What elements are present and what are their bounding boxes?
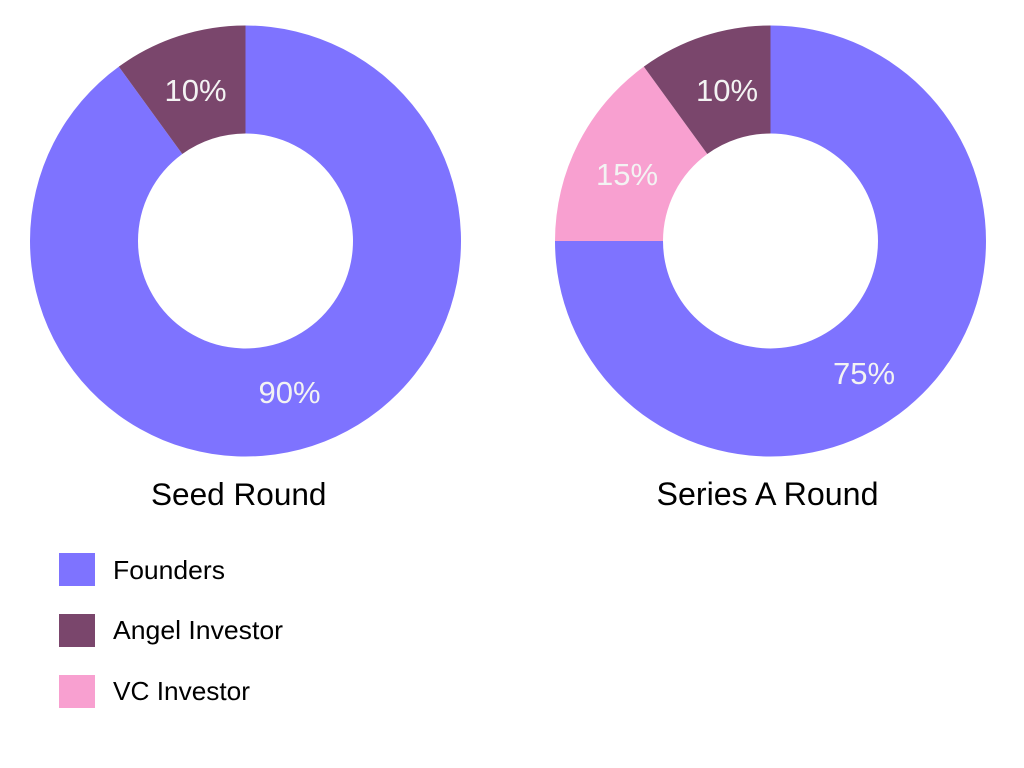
label: 10%: 10% [164,73,227,108]
donut chart: Series A Round [555,26,986,456]
legend item: VC Investor [59,675,250,708]
slice: Founders 75% [555,26,986,456]
label: 90%: 90% [258,375,321,410]
slice: Angel Investor 10% [644,26,770,154]
chart title: Seed Round: Seed Round [151,476,326,512]
label: 10%: 10% [696,73,758,108]
legend item: Angel Investor [59,614,283,647]
slice: Founders 90% [30,26,461,456]
legend item: VC Investor: VC Investor [113,676,250,706]
label: 75%: 75% [833,356,895,391]
label: 15%: 15% [596,157,658,192]
donut chart: Seed Round [30,26,461,456]
legend [59,553,283,708]
slice: VC Investor 15% [555,67,707,241]
chart title: Series A Round: Series A Round [656,476,878,512]
legend item: Angel Investor: Angel Investor [113,615,283,645]
legend item: Founders [59,553,225,586]
slice: Angel Investor 10% [119,26,246,154]
legend item: Founders: Founders [113,555,225,585]
